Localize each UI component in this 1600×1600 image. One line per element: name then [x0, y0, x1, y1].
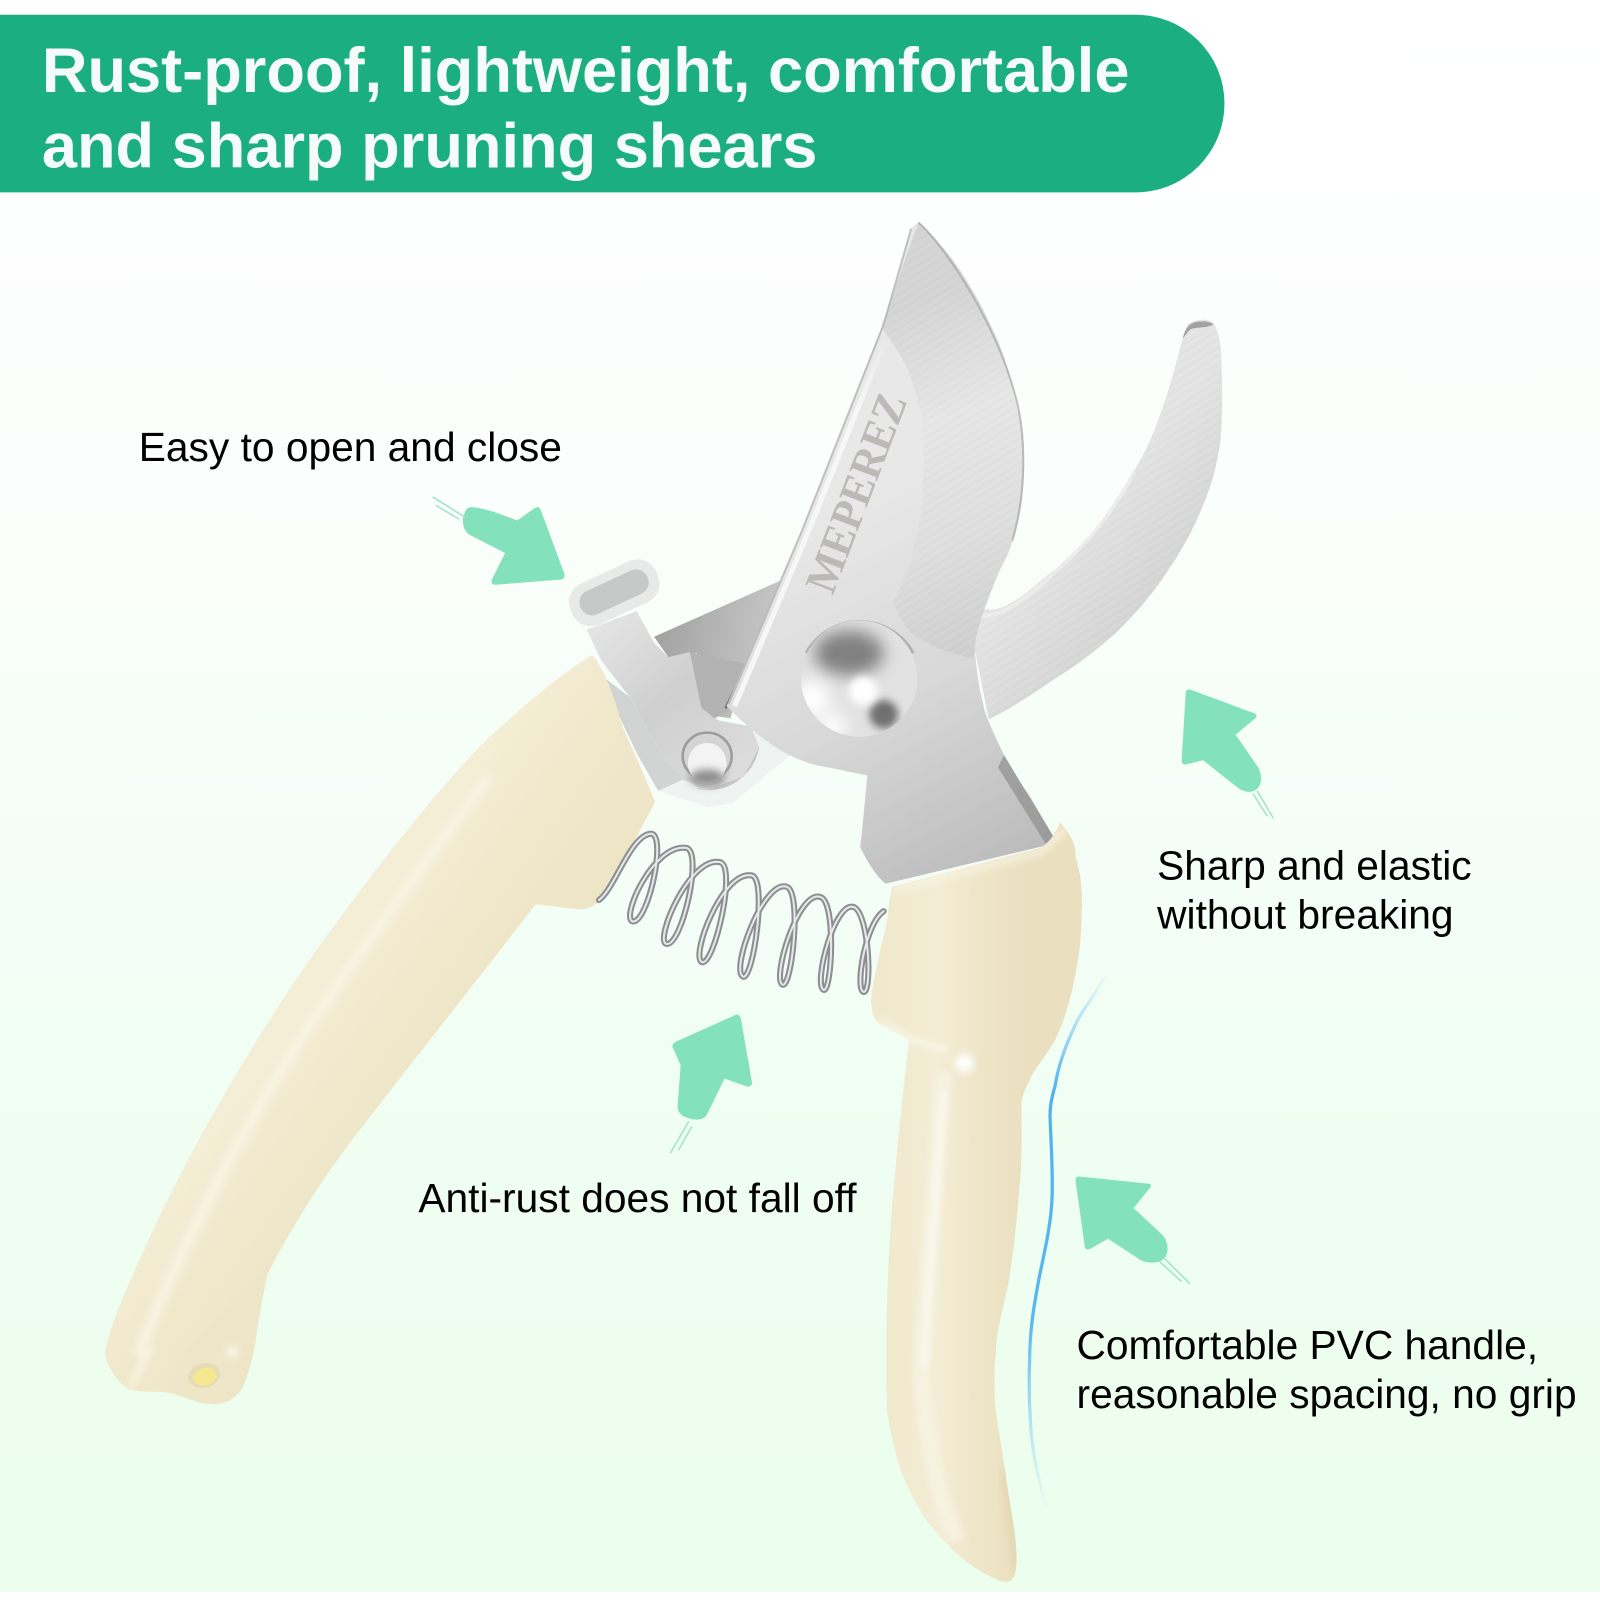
callout arrow: easy to open	[433, 497, 565, 585]
callout arrow: sharp blade	[1182, 689, 1273, 818]
dark lower-blade base plate	[654, 580, 783, 718]
upper blade	[727, 222, 1057, 884]
small rivet	[682, 732, 759, 790]
title line 1: Rust-proof, lightweight, comfortable	[42, 36, 1129, 106]
callout arrow: anti-rust spring	[670, 1014, 752, 1153]
lower curved blade	[971, 320, 1222, 719]
left handle	[105, 655, 655, 1404]
main pivot bolt	[793, 620, 917, 741]
label: sharp and elastic: Sharp and elastic	[1157, 843, 1472, 889]
coil spring	[599, 834, 884, 992]
label: easy to open: Easy to open and close	[139, 424, 562, 470]
latch shadow plate	[599, 673, 683, 791]
title banner	[0, 15, 1224, 192]
label: anti-rust: Anti-rust does not fall off	[418, 1175, 857, 1221]
label: sharp and elastic: without breaking	[1156, 892, 1454, 938]
callout arrow: comfortable handle	[1076, 1177, 1190, 1284]
label: sharp and elastic	[1156, 843, 1472, 938]
right handle	[871, 822, 1082, 1582]
title line 2: and sharp pruning shears	[42, 111, 817, 181]
MEPEREZ brand engraving: MEPEREZ	[795, 386, 917, 600]
label: comfortable handle: Comfortable PVC handle,	[1077, 1322, 1538, 1368]
label: comfortable handle	[1077, 1322, 1577, 1417]
latch lever	[562, 553, 759, 790]
blade bevel edge	[882, 222, 1024, 658]
handle hole inner	[192, 1365, 219, 1388]
curved blue grip line	[1029, 973, 1106, 1509]
white back plate	[624, 730, 797, 807]
latch finger loop	[562, 553, 666, 633]
handle end hole	[185, 1359, 223, 1392]
pruning shears illustration	[105, 222, 1222, 1582]
label: comfortable handle: reasonable spacing, no grip	[1077, 1371, 1577, 1417]
